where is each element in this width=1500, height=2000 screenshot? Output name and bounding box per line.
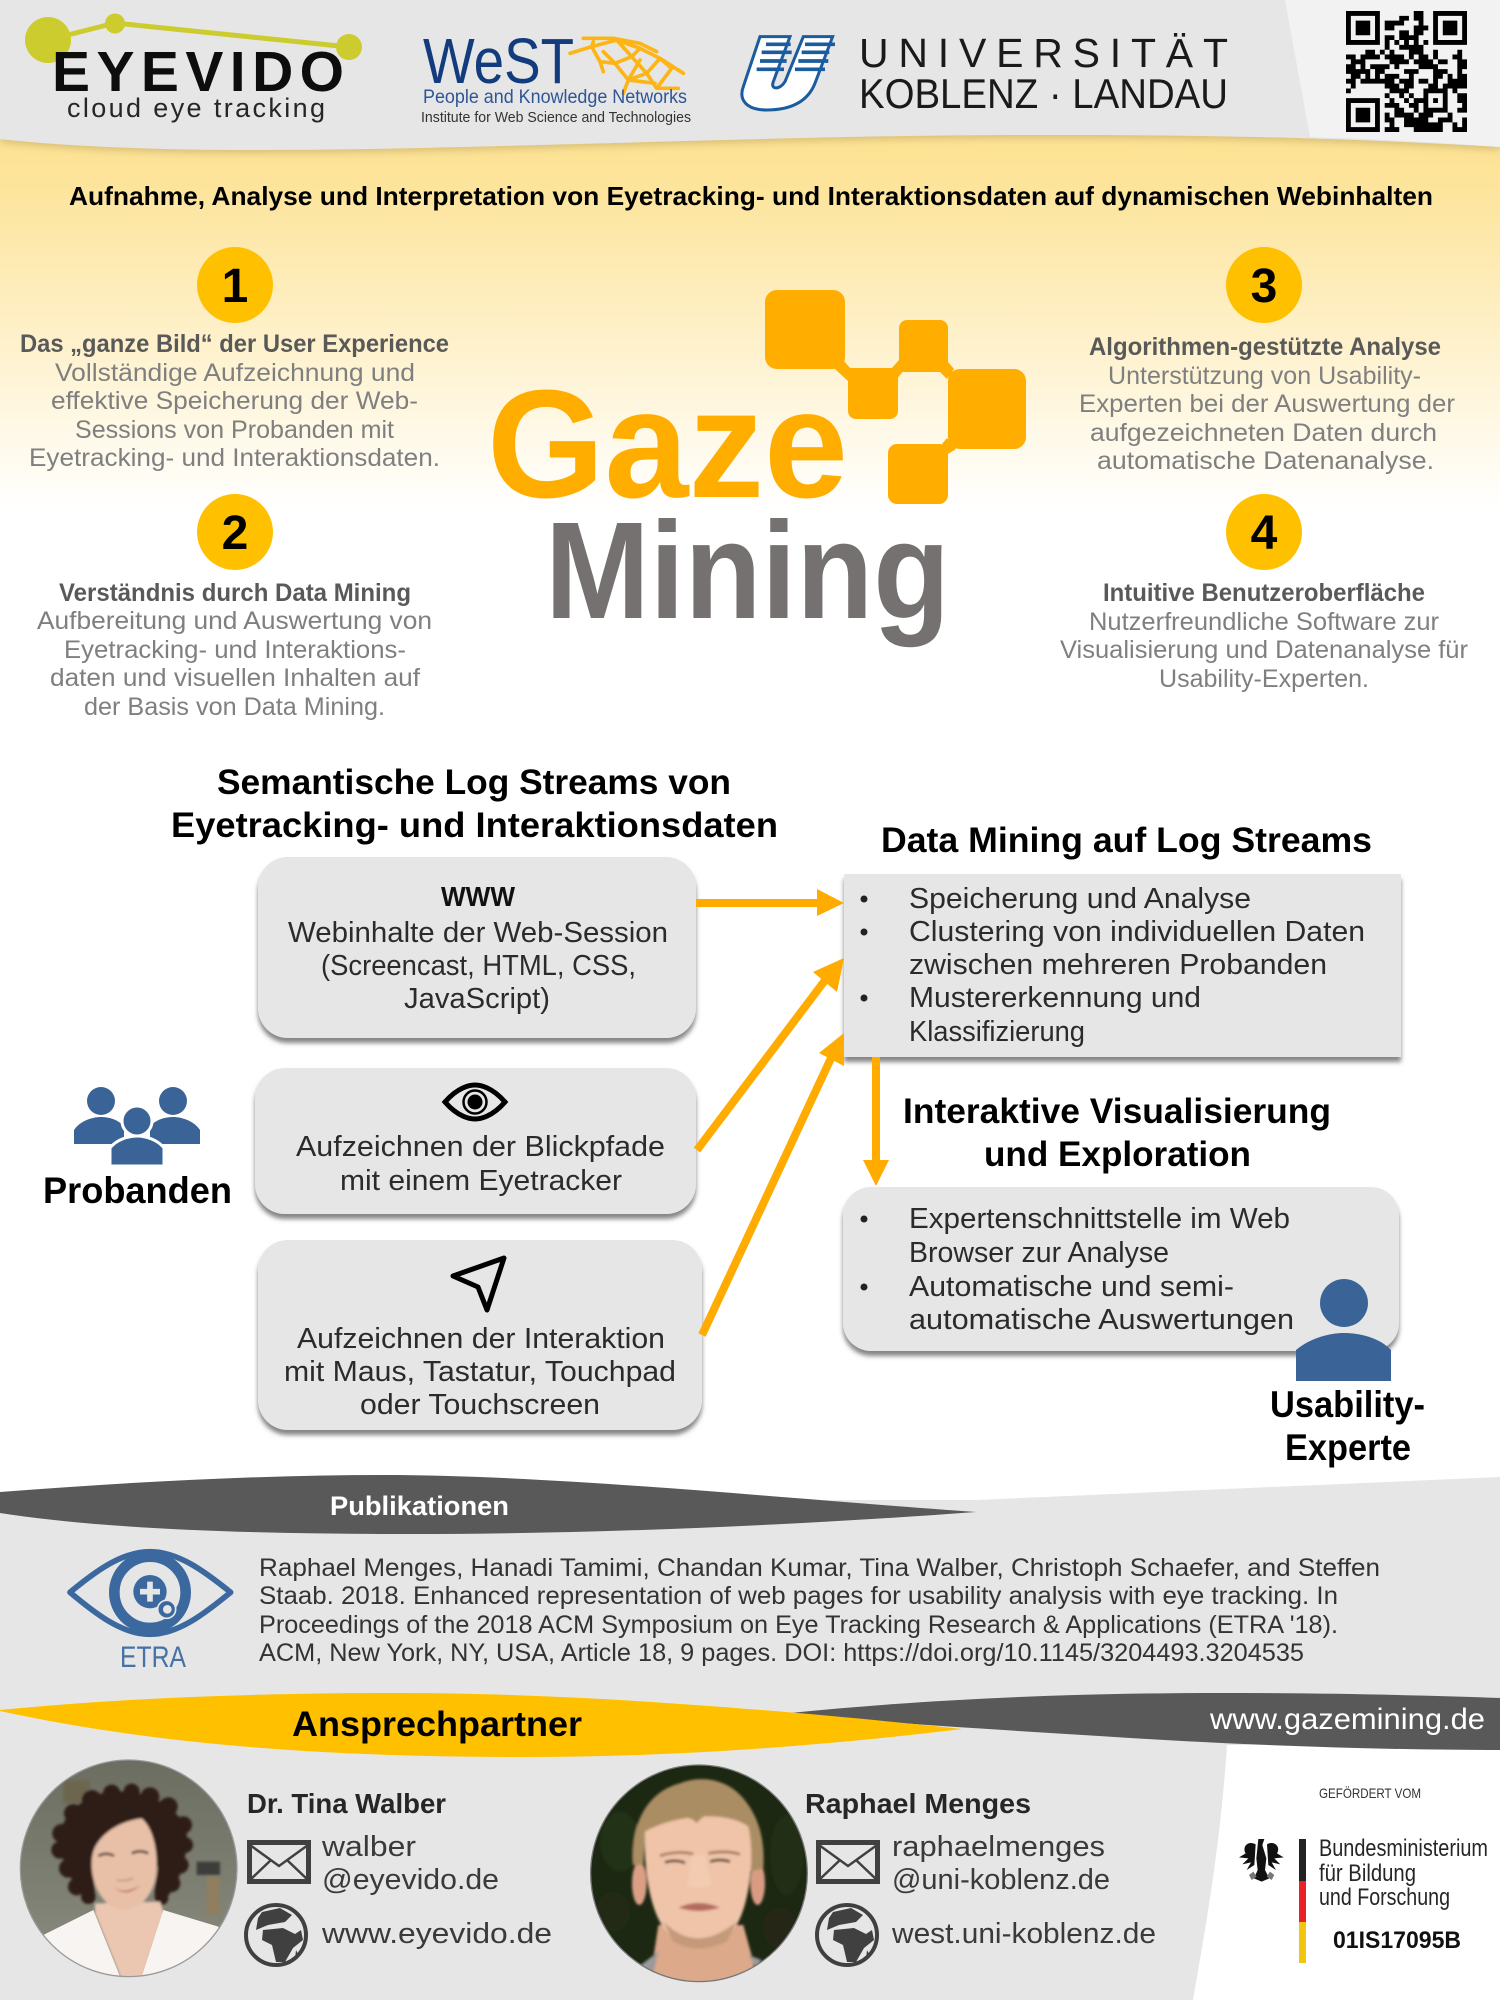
icon: people <box>74 1087 200 1166</box>
citation: ACM, New York, NY, USA, Article 18, 9 pages. DOI: https://doi.org/10.1145/3204493.3204535 <box>259 1639 1304 1667</box>
bottom grey panel <box>0 1477 1500 2000</box>
icon: globe <box>246 1905 306 1965</box>
heading: Semantische Log Streams: Eyetracking- und Interaktionsdaten <box>171 806 778 845</box>
arrow: Interaktion to Data Mining <box>702 1033 844 1335</box>
contact: Tina Walber: walber <box>321 1831 416 1863</box>
banner: Publikationen: Publikationen <box>330 1491 509 1521</box>
arrow: WWW to Data Mining <box>696 889 844 916</box>
feature 3 <box>1079 247 1455 475</box>
feature 1: effektive Speicherung der Web- <box>51 387 418 415</box>
box: Data Mining: zwischen mehreren Probanden <box>909 949 1327 981</box>
feature 4: 4 <box>1251 507 1278 560</box>
logo: Universität Koblenz-Landau: UNIVERSITÄT <box>859 30 1228 76</box>
box: Data Mining: Speicherung und Analyse <box>909 883 1251 915</box>
feature 3: 3 <box>1251 260 1277 313</box>
icon: mail <box>250 1842 308 1882</box>
Probanden group: Probanden <box>43 1170 232 1211</box>
feature 1: 1 <box>222 260 248 313</box>
heading: Semantische Log Streams: Semantische Log Streams von <box>217 763 731 802</box>
feature 4: Nutzerfreundliche Software zur <box>1089 608 1439 636</box>
contact: Raphael Menges: Raphael Menges <box>805 1788 1031 1819</box>
feature 4 <box>1060 494 1468 693</box>
heading: Interaktive Visualisierung <box>903 1092 1331 1174</box>
box: Interaktion <box>258 1240 702 1430</box>
citation: Proceedings of the 2018 ACM Symposium on Eye Tracking Research & Applications (ETRA '18). <box>259 1611 1338 1639</box>
box: Interaktion: oder Touchscreen <box>360 1389 600 1421</box>
box: Interaktive Visualisierung: automatische Auswertungen <box>909 1304 1294 1336</box>
banner: Ansprechpartner <box>0 1693 962 1757</box>
feature 2: Eyetracking- und Interaktions- <box>64 636 406 664</box>
icon: ETRA eye: ETRA <box>120 1641 186 1674</box>
logo: Universität Koblenz-Landau <box>742 30 1228 117</box>
box: WWW: (Screencast, HTML, CSS, <box>321 950 636 982</box>
feature 2: 2 <box>222 507 248 560</box>
logo: WeST: People and Knowledge Networks <box>423 87 687 108</box>
box: WWW <box>258 857 696 1038</box>
arrow: Eyetracker to Data Mining <box>697 958 844 1150</box>
feature 2: der Basis von Data Mining. <box>84 693 385 721</box>
feature 1 <box>20 247 449 472</box>
box: Eyetracker: Aufzeichnen der Blickpfade <box>296 1131 665 1163</box>
logo: Eyevido: EYEVIDO <box>52 40 344 104</box>
funding: BMBF: und Forschung <box>1319 1884 1450 1911</box>
box: Data Mining: Clustering von individuellen Daten <box>909 916 1365 948</box>
feature 3: Algorithmen-gestützte Analyse <box>1089 333 1441 361</box>
title: Aufnahme, Analyse und Interpretation von Eyetracking- und Interaktionsdaten auf dynamischen Webinhalten <box>69 181 1433 211</box>
heading: Data Mining auf Log Streams: Data Mining auf Log Streams <box>881 821 1372 860</box>
logo: WeST: WeST <box>423 25 574 97</box>
box: Interaktive Visualisierung <box>843 1187 1399 1351</box>
header band <box>0 0 1500 150</box>
box: Data Mining: Klassifizierung <box>909 1016 1085 1048</box>
contact: Tina Walber: @eyevido.de <box>322 1864 499 1896</box>
contact: Raphael Menges: west.uni-koblenz.de <box>891 1918 1156 1950</box>
contact: Raphael Menges: @uni-koblenz.de <box>892 1864 1110 1896</box>
contact: Tina Walber: Dr. Tina Walber <box>247 1788 446 1819</box>
feature 2: daten und visuellen Inhalten auf <box>50 664 420 692</box>
feature 1: Eyetracking- und Interaktionsdaten. <box>29 444 440 472</box>
icon: ETRA eye <box>70 1552 231 1674</box>
citation: Staab. 2018. Enhanced representation of web pages for usability analysis with eye tracking. In <box>259 1582 1338 1610</box>
contact: Tina Walber <box>246 1788 552 1965</box>
icon: person <box>1296 1279 1391 1381</box>
icon: mail <box>818 1842 878 1882</box>
icon: globe <box>817 1905 877 1965</box>
icon: cursor <box>453 1258 504 1310</box>
icon: eye <box>445 1085 505 1119</box>
Probanden group <box>43 1087 232 1211</box>
box: Eyetracker <box>255 1068 696 1214</box>
contact: Tina Walber: www.eyevido.de <box>321 1918 552 1950</box>
Usability-Experte group: Usability- <box>1270 1384 1425 1425</box>
contact: Raphael Menges: raphaelmenges <box>892 1831 1105 1863</box>
feature 2: Verständnis durch Data Mining <box>59 579 411 607</box>
background gradient <box>0 130 1500 530</box>
photo: Tina Walber <box>17 1757 243 1990</box>
box: Interaktive Visualisierung: Browser zur Analyse <box>909 1237 1169 1269</box>
feature 3: aufgezeichneten Daten durch <box>1090 419 1437 447</box>
feature 1: Vollständige Aufzeichnung und <box>55 359 415 387</box>
banner: Ansprechpartner: Ansprechpartner <box>292 1705 582 1744</box>
heading: Semantische Log Streams <box>171 763 778 845</box>
feature 2 <box>37 494 432 721</box>
logo: Eyevido <box>25 14 362 123</box>
photo: Raphael Menges <box>587 1762 813 1988</box>
box: Interaktive Visualisierung: Automatische und semi- <box>909 1271 1234 1303</box>
feature 2: Aufbereitung und Auswertung von <box>37 607 432 635</box>
QR code <box>1346 13 1467 130</box>
box: WWW: Webinhalte der Web-Session <box>288 917 668 949</box>
funding: BMBF: für Bildung <box>1319 1860 1416 1887</box>
arrow: Data Mining to Visualisierung <box>863 1057 889 1186</box>
Gaze Mining logo: Gaze <box>487 358 848 530</box>
feature 4: Visualisierung und Datenanalyse für <box>1060 636 1468 664</box>
feature 3: automatische Datenanalyse. <box>1097 447 1434 475</box>
banner: website <box>790 1693 1500 1750</box>
logo: WeST <box>421 25 691 126</box>
Usability-Experte group: Experte <box>1285 1427 1411 1468</box>
banner: website: www.gazemining.de <box>1209 1703 1485 1736</box>
funding: BMBF: 01IS17095B <box>1333 1927 1461 1954</box>
heading: Interaktive Visualisierung: und Exploration <box>984 1135 1251 1174</box>
icon: federal eagle <box>1239 1839 1284 1882</box>
box: Interaktion: mit Maus, Tastatur, Touchpad <box>284 1356 676 1388</box>
box: Eyetracker: mit einem Eyetracker <box>340 1165 622 1197</box>
box: WWW: JavaScript) <box>404 983 550 1015</box>
feature 1: Sessions von Probanden mit <box>75 416 394 444</box>
logo: WeST: Institute for Web Science and Technologies <box>421 110 691 126</box>
citation <box>259 1554 1380 1667</box>
feature 1: Das „ganze Bild“ der User Experience <box>20 330 449 358</box>
contact: Raphael Menges <box>805 1788 1156 1965</box>
citation: Raphael Menges, Hanadi Tamimi, Chandan Kumar, Tina Walber, Christoph Schaefer, and Steffen <box>259 1554 1380 1582</box>
feature 4: Usability-Experten. <box>1159 665 1369 693</box>
box: Data Mining <box>844 874 1401 1057</box>
Gaze Mining logo <box>487 290 1026 648</box>
feature 3: Unterstützung von Usability- <box>1108 362 1421 390</box>
heading: Interaktive Visualisierung: Interaktive Visualisierung <box>903 1092 1331 1131</box>
funding: BMBF <box>1239 1784 1488 1963</box>
logo: Universität Koblenz-Landau: KOBLENZ · LANDAU <box>859 70 1228 117</box>
box: Interaktion: Aufzeichnen der Interaktion <box>297 1323 665 1355</box>
Usability-Experte group <box>1270 1279 1425 1468</box>
box: Interaktive Visualisierung: Expertenschnittstelle im Web <box>909 1203 1290 1235</box>
Gaze Mining logo: Mining <box>545 494 950 648</box>
feature 3: Experten bei der Auswertung der <box>1079 390 1455 418</box>
box: Data Mining: Mustererkennung und <box>909 982 1201 1014</box>
feature 4: Intuitive Benutzeroberfläche <box>1103 579 1425 607</box>
logo: Eyevido: cloud eye tracking <box>67 93 325 123</box>
box: WWW: WWW <box>441 881 516 912</box>
funding: BMBF: GEFÖRDERT VOM <box>1319 1784 1421 1801</box>
banner: Publikationen <box>0 1475 976 1534</box>
